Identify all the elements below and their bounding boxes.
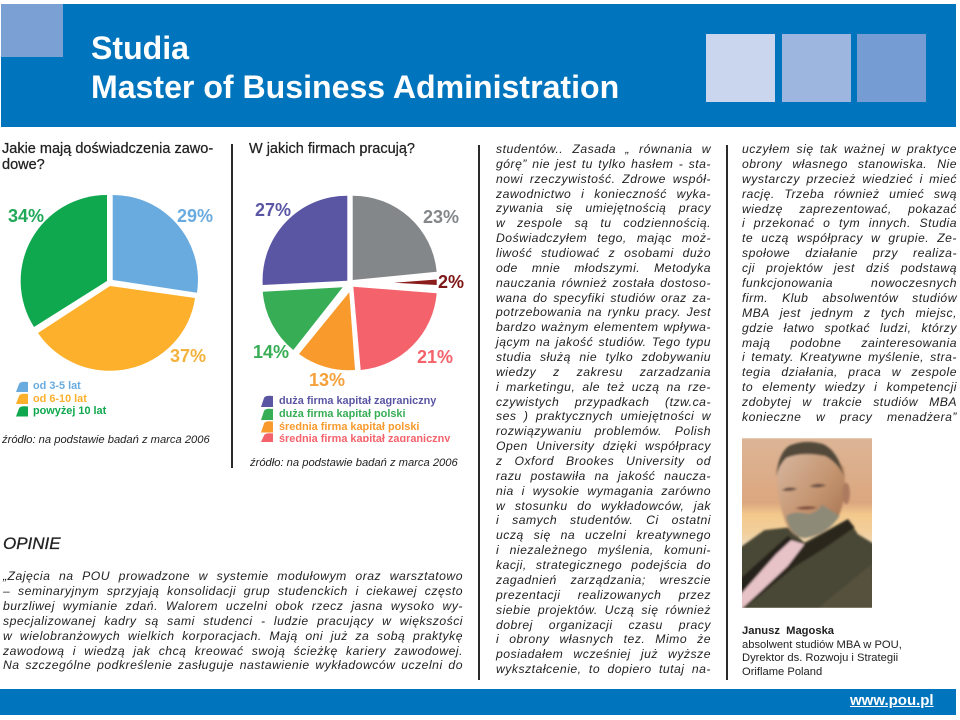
chart: experience pie: 29% <box>177 206 213 226</box>
opinion text column 2 <box>494 142 712 676</box>
caption: person: Oriflame Poland <box>742 666 822 678</box>
source note left: źródło: na podstawie badań z marca 2006 <box>2 434 210 446</box>
caption: person: Janusz Magoska <box>742 625 834 637</box>
opinion text column 3: wystarczy przecież wiedzieć i mieć <box>742 172 957 186</box>
opinion text column 3: i przekonać o tym innych. Studia <box>742 216 957 230</box>
opinion text: w wielobranżowych wielkich korporacjach. Mają oni już za sobą praktykę <box>3 629 463 643</box>
opinion text column 2: prezentacji realizowanych przez <box>496 588 711 602</box>
heading: companies: W jakich firmach pracują? <box>249 141 415 157</box>
opinion text column 3: konieczne w pracy menadżera” <box>742 410 957 424</box>
opinion text column 2: studia służą nie tylko zdobywaniu <box>496 350 711 364</box>
opinion text column 2: ode mnie młodszymi. Metodyka <box>496 261 711 275</box>
opinion text column 3: gdzie łatwo spotkać ludzi, którzy <box>742 321 957 335</box>
opinion text: „Zajęcia na POU prowadzone w systemie modułowym oraz warsztatowo <box>3 569 463 583</box>
opinion text column 2: rozwiązywaniu problemów. Polish <box>496 424 711 438</box>
opinion text column 2: studentów.. Zasada „ równania w <box>496 142 711 156</box>
opinion text column 2: nia i wysokie wymagania zarówno <box>496 484 711 498</box>
opinion text column 3: obrony własnego stanowiska. Nie <box>742 157 957 171</box>
title <box>91 30 619 104</box>
rule 2 <box>478 145 480 680</box>
opinion text column 2: górę” nie jest tu tylko hasłem - sta- <box>496 157 711 171</box>
chart: companies pie <box>253 196 464 442</box>
opinion text column 3: te uczą współpracy w grupie. Ze- <box>742 231 957 245</box>
heading: experience <box>2 141 213 173</box>
opinion text column 3: mają podobne zainteresowania <box>742 336 957 350</box>
opinion text: burzliwej wymianie zdań. Walorem uczelni obok rzecz jasna wysoko wy- <box>3 599 463 613</box>
caption: person <box>742 625 902 678</box>
opinion text column 2: i marketingu, ale też uczą na rze- <box>496 380 711 394</box>
opinion text column 2: zagadnień zarządzania; wreszcie <box>496 573 711 587</box>
opinion text column 2: zywania się umiejętnością pracy <box>496 201 711 215</box>
footer band <box>0 689 956 715</box>
opinion text column 2: nauczania również została dostoso- <box>496 276 711 290</box>
opinion text column 2: nowi rzeczywistość. Zdrowe współ- <box>496 172 711 186</box>
opinion text column 2: z Oxford Brookes University od <box>496 454 711 468</box>
opinion text column 2: wykształcenie, to dopiero tutaj na- <box>496 662 711 676</box>
opinion text column 2: jącym na jakość studiów. Tego typu <box>496 335 711 349</box>
opinion text: Na szczególne podkreślenie zasługuje nastawienie wykładowców uczelni do <box>3 658 463 672</box>
chart: companies pie: duża firma kapitał polski <box>279 408 406 420</box>
opinion text column 2: i niezależnego myślenia, komuni- <box>496 543 711 557</box>
opinion text column 2: wana do specyfiki studiów oraz za- <box>496 291 711 305</box>
chart: experience pie: od 6-10 lat <box>33 393 87 405</box>
chart: companies pie: 13% <box>309 370 345 390</box>
opinion text: zawodową i wiedzą jak chcą kreować swoją ścieżkę kariery zawodowej. <box>3 644 463 658</box>
opinion text column 2: kacji, strategicznego podejścia do <box>496 558 711 572</box>
opinion text column 2: liwość studiować z osobami dużo <box>496 246 711 260</box>
opinion text column 2: ses ) praktycznych umiejętności w <box>496 409 711 423</box>
opinion text column 2: w stosunku do wykładowców, jak <box>496 499 711 513</box>
opinion text column 2: dobrej organizacji czasu pracy <box>496 618 711 632</box>
caption: person: Dyrektor ds. Rozwoju i Strategii <box>742 652 898 664</box>
header band <box>1 4 956 127</box>
chart: companies pie: 2% <box>438 272 464 292</box>
opinion text column 2: Doświadczyłem tego, mając moż- <box>496 231 711 245</box>
chart: companies pie: duża firma kapitał zagraniczny <box>279 395 436 407</box>
opinion text column 2: Open University dzięki współpracy <box>496 439 711 453</box>
opinion text column 3: firm. Klub absolwentów studiów <box>742 291 957 305</box>
chart: experience pie: od 3-5 lat <box>33 380 81 392</box>
heading: opinions: OPINIE <box>3 534 61 553</box>
opinion text column 3: MBA jest jednym z tych miejsc, <box>742 306 957 320</box>
opinion text: specjalizowanej kadry są sami studenci - ludzie pracujący w większości <box>3 614 463 628</box>
opinion text column 2: posiadałem wcześniej już wyższe <box>496 647 711 661</box>
opinion text <box>2 569 463 672</box>
title: Master of Business Administration <box>91 68 619 104</box>
opinion text column 3: to elementy wiedzy i kompetencji <box>742 380 957 394</box>
opinion text column 3: funkcjonowania nowoczesnych <box>742 276 957 290</box>
chart: companies pie: 14% <box>253 342 289 362</box>
chart: companies pie: 23% <box>423 207 459 227</box>
chart: experience pie: 37% <box>170 346 206 366</box>
opinion text: – seminaryjnym sprzyjają konsolidacji grup studenckich i ciekawej często <box>3 584 463 598</box>
opinion text column 2: uczą się na uczelni kreatywnego <box>496 528 711 542</box>
opinion text column 2: i obrony własnych tez. Mimo że <box>496 632 711 646</box>
heading: experience: Jakie mają doświadczenia zawo- <box>2 141 213 157</box>
decorative squares <box>706 34 926 102</box>
opinion text column 2: w zespole są tu codziennością. <box>496 216 711 230</box>
opinion text column 2: razu postawiła na jakość naucza- <box>496 469 711 483</box>
title: Studia <box>91 30 189 66</box>
opinion text column 3: tegia działania, praca w zespole <box>742 365 957 379</box>
opinion text column 3 <box>742 142 958 424</box>
rule 1 <box>231 144 233 468</box>
heading: experience: dowe? <box>2 157 45 173</box>
opinion text column 2: bardzo ważnym elementem wpływa- <box>496 320 711 334</box>
opinion text column 2: zawodnictwo i konieczność wyka- <box>496 187 711 201</box>
footer url: www.pou.pl <box>850 692 934 709</box>
chart: experience pie <box>8 195 213 417</box>
rule 3 <box>726 145 728 680</box>
opinion text column 2: i samych studentów. Ci ostatni <box>496 513 711 527</box>
photo: portrait <box>742 438 872 608</box>
source note right: źródło: na podstawie badań z marca 2006 <box>250 457 458 469</box>
opinion text column 2: potrzebowania na rynku pracy. Jest <box>496 305 711 319</box>
opinion text column 3: wiedzę zaprezentować, pokazać <box>742 202 957 216</box>
chart: companies pie: 21% <box>417 347 453 367</box>
corner square <box>1 4 63 57</box>
opinion text column 3: rację. Trzeba również umieć swą <box>742 187 957 201</box>
opinion text column 3: zdobytej w trakcie studiów MBA <box>742 395 957 409</box>
chart: experience pie: 34% <box>8 206 44 226</box>
chart: companies pie: średnia firma kapitał polski <box>279 421 419 433</box>
opinion text column 2: czywistych przypadkach (tzw.ca- <box>496 395 711 409</box>
opinion text column 3: uczyłem się tak ważnej w praktyce <box>742 142 957 156</box>
opinion text column 3: i tematy. Kreatywne myślenie, stra- <box>742 350 957 364</box>
opinion text column 2: wiedzy z zakresu zarzadzania <box>496 365 711 379</box>
chart: companies pie: 27% <box>255 200 291 220</box>
caption: person: absolwent studiów MBA w POU, <box>742 639 902 651</box>
opinion text column 3: cji projektów jest dziś podstawą <box>742 261 957 275</box>
opinion text column 3: społowe działanie przy realiza- <box>742 246 957 260</box>
chart: experience pie: powyżej 10 lat <box>33 405 107 417</box>
opinion text column 2: siebie projektów. Uczą się również <box>496 603 711 617</box>
